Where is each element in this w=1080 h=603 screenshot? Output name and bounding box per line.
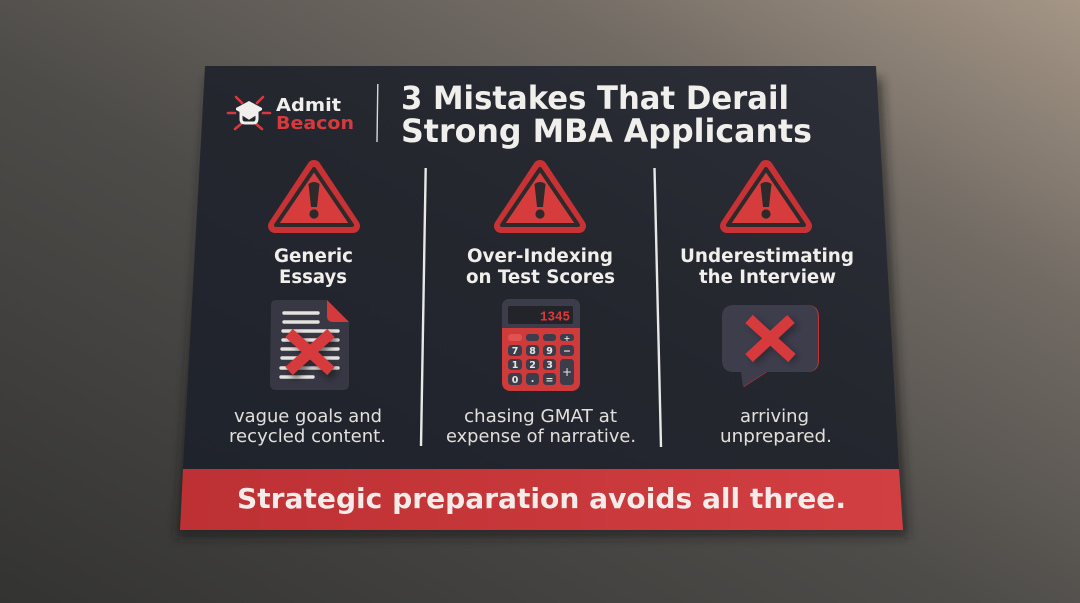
panel: mistake 2 [446, 167, 636, 447]
heading: Underestimating the Interview: Underestimating [680, 246, 854, 267]
icon: calculator: − [563, 346, 571, 357]
icon: calculator: 2 [529, 360, 536, 371]
heading: Generic Essays: Essays [279, 267, 347, 288]
title [401, 79, 812, 150]
icon: calculator: + [564, 334, 570, 343]
icon: document with X [270, 300, 349, 390]
description 3 [720, 407, 832, 447]
description 2: expense of narrative. [446, 427, 636, 447]
description 1 [229, 407, 386, 447]
icon: warning triangle 1 [275, 167, 353, 226]
panel: dark card [183, 66, 899, 469]
icon: calculator: 3 [546, 360, 553, 371]
footer text: Strategic preparation avoids all three. [237, 482, 846, 515]
icon: calculator: 9 [546, 346, 553, 357]
icon: warning triangle 3 [727, 167, 805, 226]
column divider 1 [421, 168, 426, 446]
description 2: chasing GMAT at [464, 407, 617, 427]
footer band [180, 469, 903, 530]
description 1: recycled content. [229, 427, 386, 447]
description 1: vague goals and [234, 407, 382, 427]
description 2 [446, 407, 636, 447]
heading: Over-Indexing on Test Scores: on Test Scores [466, 267, 615, 288]
panel: mistake 1 [229, 167, 386, 447]
icon: calculator: 1345 [540, 310, 570, 326]
icon: calculator: 7 [512, 346, 518, 357]
icon: calculator: + [562, 365, 572, 379]
title: 3 Mistakes That Derail [401, 79, 789, 117]
header divider [376, 84, 379, 142]
icon: calculator: 0 [512, 375, 519, 386]
logo word: Admit: Admit [276, 95, 341, 116]
logo: Admit Beacon [228, 95, 354, 134]
heading: Generic Essays: Generic [274, 246, 353, 267]
column divider 2 [654, 168, 661, 447]
icon: calculator [502, 299, 580, 391]
icon: speech bubble with X [722, 305, 819, 387]
heading: Over-Indexing on Test Scores: Over-Indexing [467, 246, 613, 267]
heading: Underestimating the Interview [680, 246, 854, 288]
heading: Underestimating the Interview: the Interview [699, 267, 836, 288]
panel: mistake 3 [680, 167, 854, 447]
logo word: Beacon: Beacon [276, 113, 354, 134]
icon: calculator: . [531, 374, 534, 385]
heading: Over-Indexing on Test Scores [466, 246, 615, 288]
title: Strong MBA Applicants [401, 112, 812, 150]
icon: calculator: = [546, 375, 553, 386]
icon: calculator: 8 [529, 346, 536, 357]
card shadow [176, 78, 908, 538]
icon: beacon rays [228, 97, 270, 129]
heading: Generic Essays [274, 246, 353, 288]
icon: warning triangle 2 [501, 167, 579, 226]
icon: calculator: 1 [512, 360, 518, 371]
description 3: arriving [740, 407, 809, 427]
description 3: unprepared. [720, 427, 832, 447]
icon: graduation cap [236, 101, 262, 123]
